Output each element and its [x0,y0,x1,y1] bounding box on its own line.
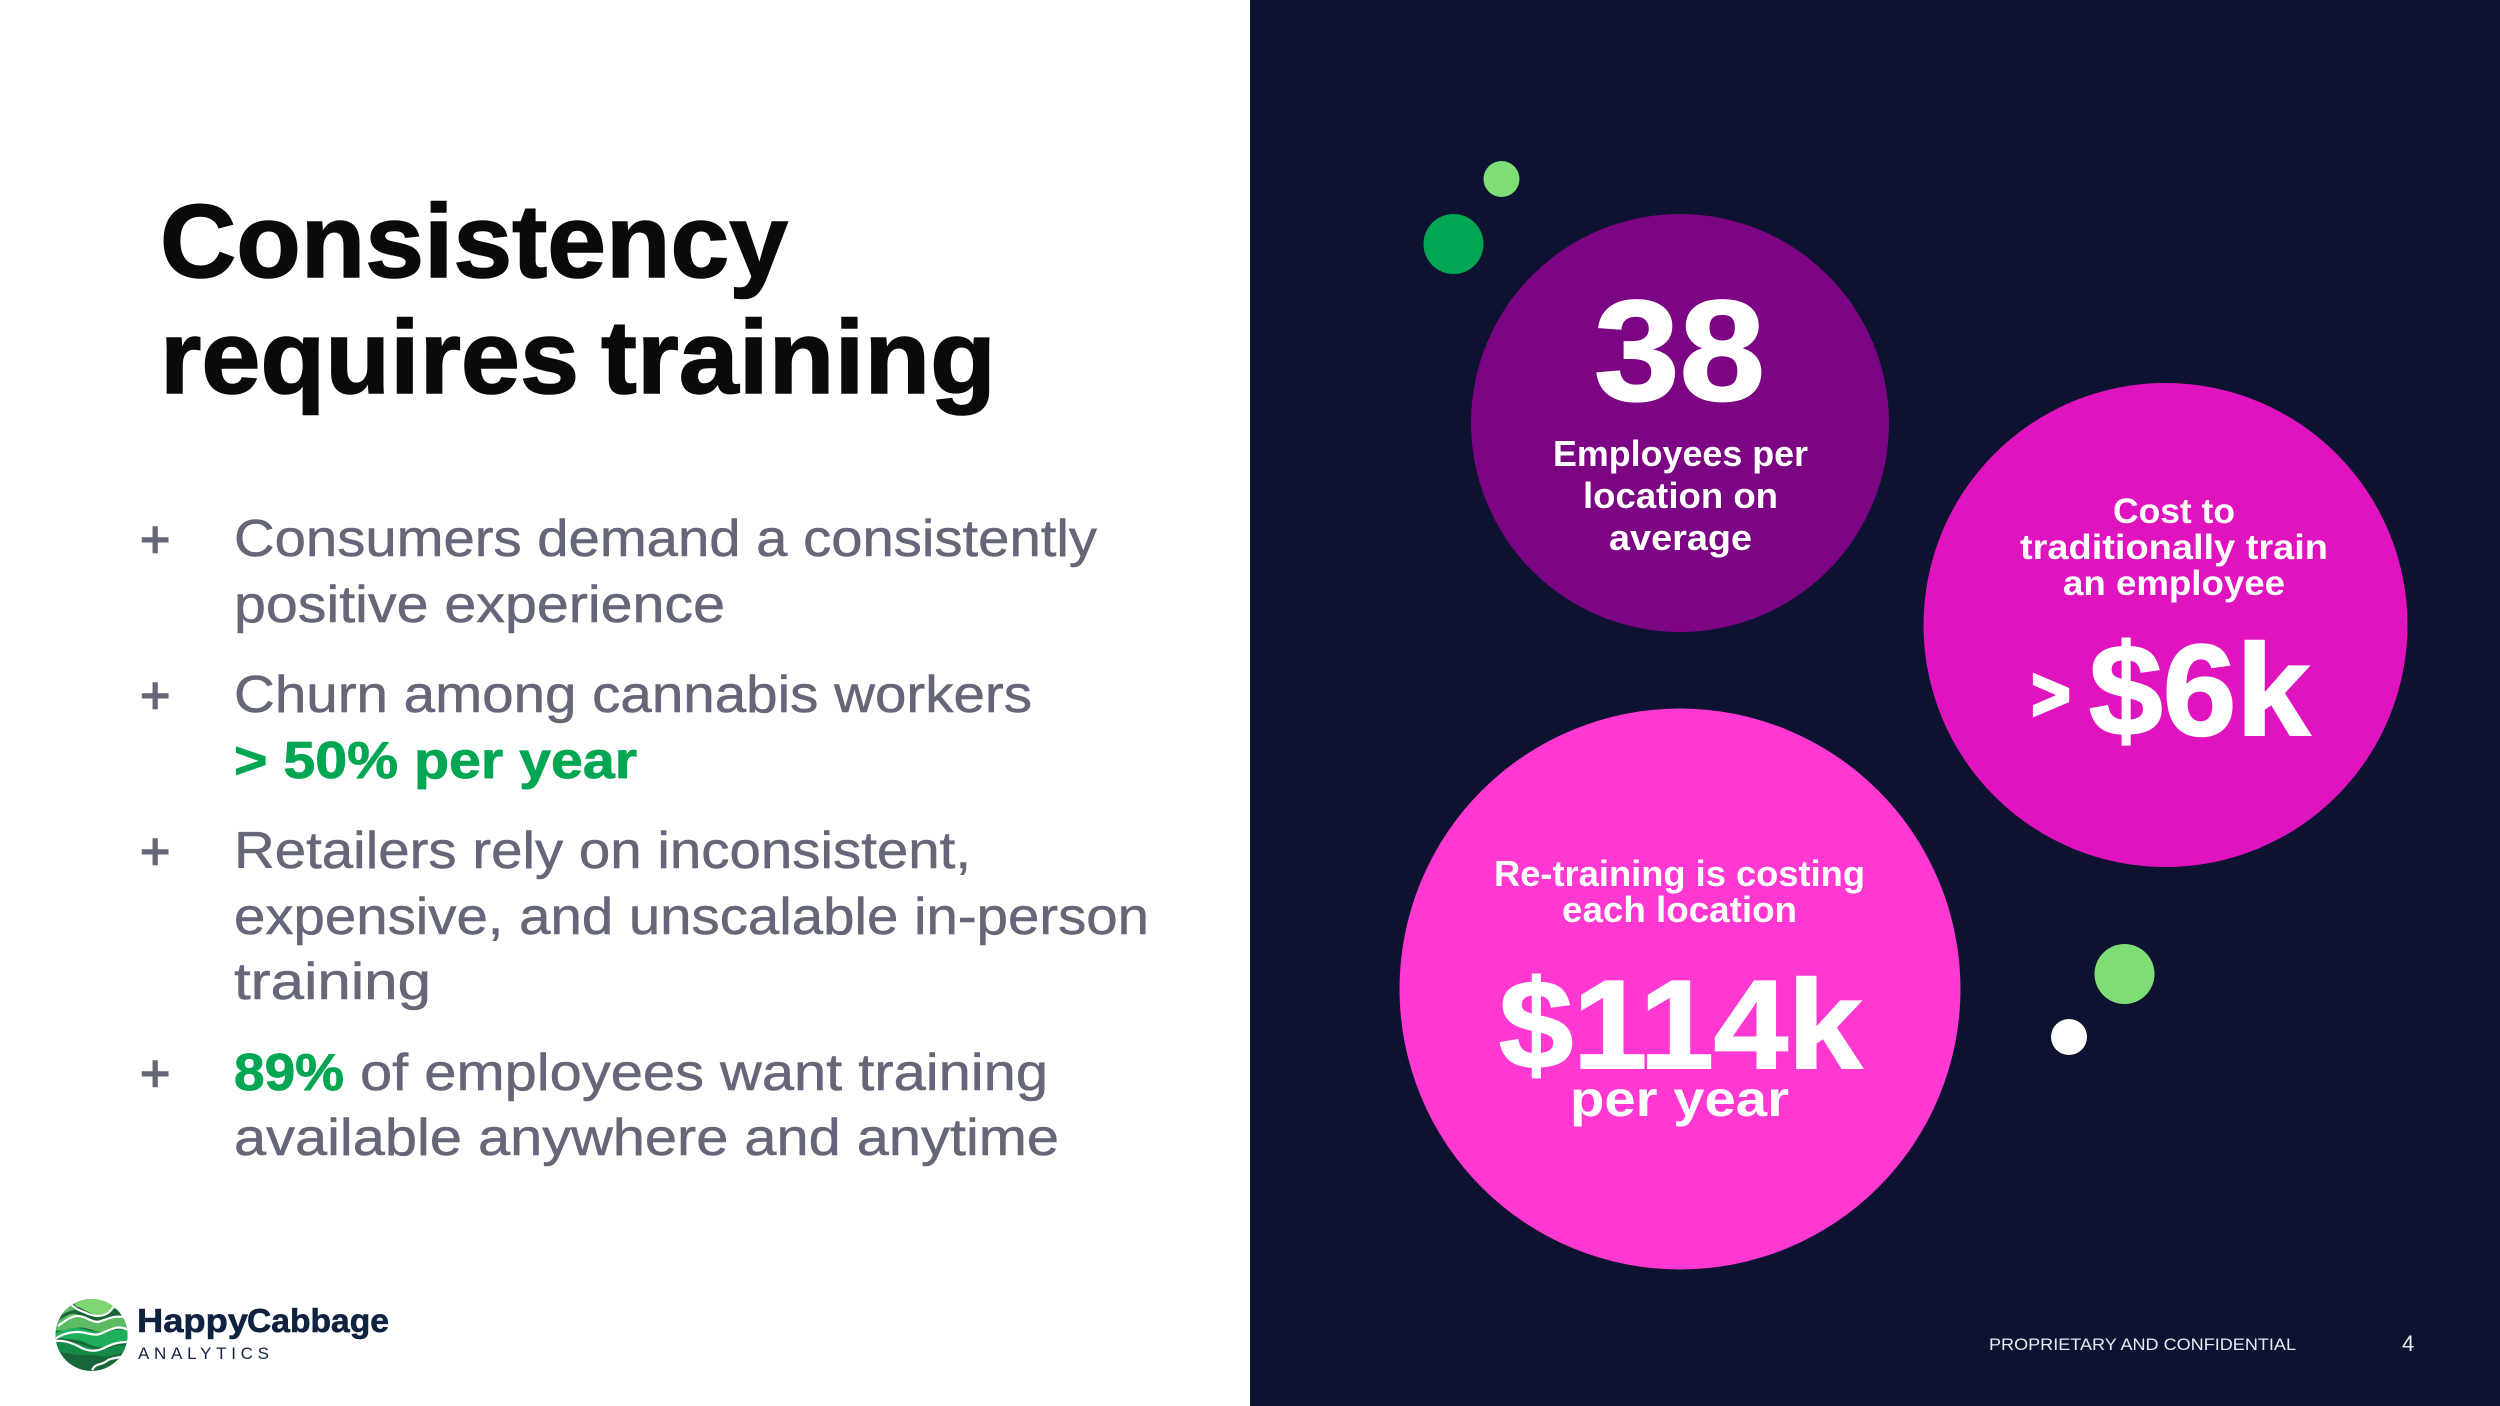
bullet: retailers: + [140,823,170,881]
logo: Happy Cabbage Analytics: Cabbage [247,1302,389,1339]
stat circle: employees per location [1471,214,1889,632]
title: training [601,300,996,416]
bullet: consumers [140,510,1097,634]
title: requires [160,300,579,416]
stat label: retraining: Re-training is costing [1494,853,1865,894]
bullet: 89 percent: 89% [234,1044,344,1102]
bullet: churn: + [140,667,170,725]
decorative dot: light green top [1484,161,1520,197]
stat label: retraining [1494,853,1865,930]
panel: right dark background [1250,0,2500,1406]
stat unit: per year: per year [1570,1071,1789,1127]
logo wordmark: Happy [137,1302,249,1339]
stat label: retraining: each location [1562,889,1797,930]
title [160,184,996,416]
decorative dot: dark green top [1424,214,1484,274]
bullet: 89 percent: of employees want training [360,1044,1048,1102]
footer: page number: 4 [2402,1331,2414,1356]
bullet: retailers: Retailers rely on inconsistent, [234,822,971,880]
decorative dot: light green lower [2094,944,2154,1004]
bullet: 89 percent: + [140,1045,170,1103]
stat circle: retraining cost [1400,708,1960,1270]
stat label: employees: location on [1583,475,1778,516]
stat value: 38: 38 [1594,272,1765,431]
bullet: consumers: positive experience [234,576,725,634]
bullet: churn: > 50% per year [234,732,637,790]
decorative dot: white [2051,1019,2087,1055]
stat circle: cost to train [1924,383,2408,867]
bullet: churn: Churn among cannabis workers [234,666,1032,724]
panel: left background [0,0,1250,1406]
stat label: employees: average [1609,517,1752,558]
stat value: more than 6k: $6k [2089,617,2311,763]
bullet: 89 percent: available anywhere and anytime [234,1109,1059,1167]
bullet: consumers: Consumers demand a consistently [234,510,1097,568]
bullet: churn [140,666,1032,790]
title: Consistency [160,184,788,300]
bullet: 89 percent [140,1044,1059,1167]
bullet: retailers [140,822,1149,1011]
footer: confidentiality note: PROPRIETARY AND CONFIDENTIAL [1989,1335,2296,1354]
bullet: retailers: expensive, and unscalable in-person [234,888,1149,946]
stat value: 114k: $114k [1499,954,1863,1095]
stat label: cost: Cost to [2113,492,2235,531]
stat label: cost [2020,492,2328,603]
bullet: consumers: + [140,511,170,569]
stat label: cost: an employee [2063,564,2285,603]
logo: Happy Cabbage Analytics [55,1299,389,1371]
stat value: more than 6k: > [2032,655,2070,735]
stat label: cost: traditionally train [2020,528,2328,567]
logo subtitle: ANALYTICS [138,1344,269,1363]
bullet: retailers: training [234,953,431,1011]
bullet list [140,510,1149,1167]
stat label: employees [1553,433,1808,558]
icon: cabbage globe [55,1299,128,1371]
stat label: employees: Employees per [1553,433,1808,474]
